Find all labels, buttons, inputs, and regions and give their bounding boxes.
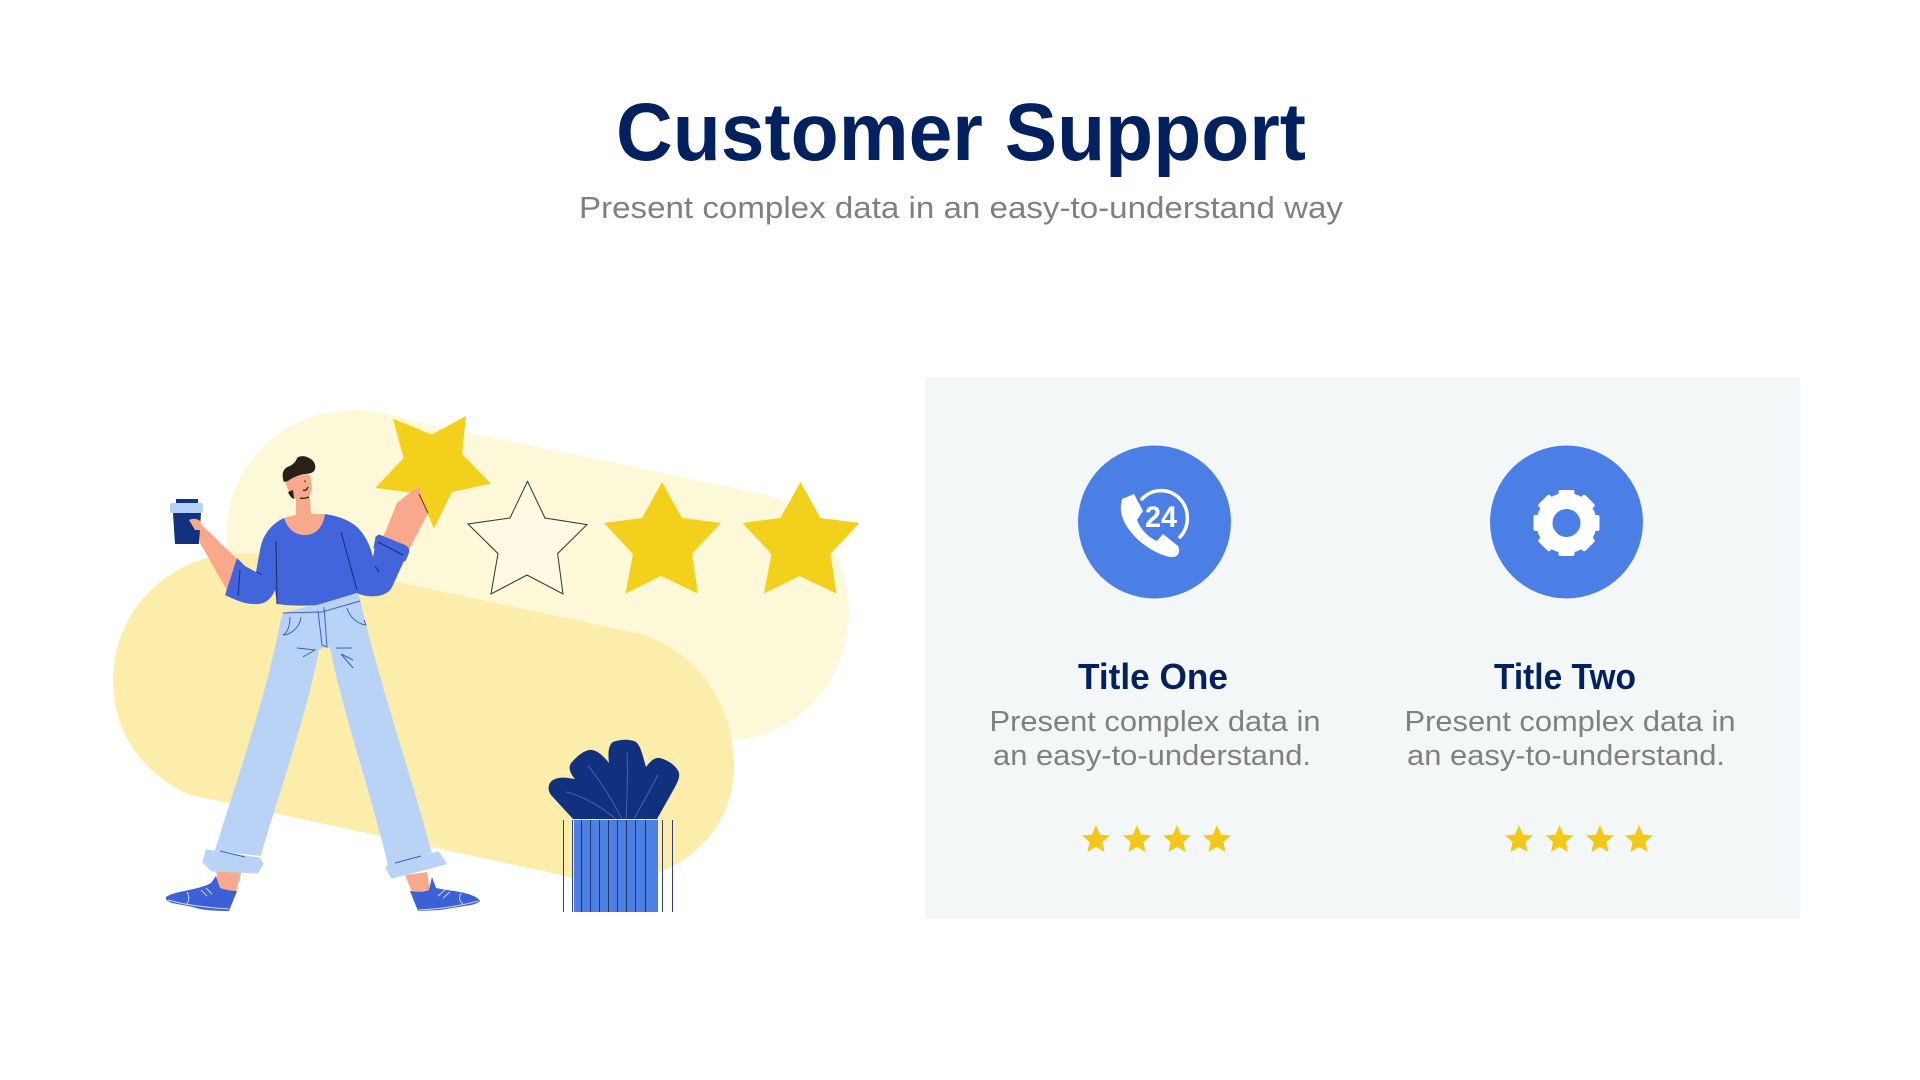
coffee cup [170, 499, 203, 544]
forearm: left [190, 519, 238, 592]
leaf veins [566, 752, 658, 819]
description: title two [1404, 706, 1736, 772]
pot stripes [564, 820, 672, 912]
hand crease on star [419, 494, 428, 513]
arc [1142, 491, 1187, 537]
hair [283, 456, 315, 499]
panel background [925, 377, 1800, 919]
description: title one: Present complex data in [990, 706, 1320, 738]
ankles [216, 868, 430, 892]
icon: gear [1490, 446, 1643, 598]
title: Customer Support [616, 87, 1306, 178]
background blob: dark yellow [113, 553, 734, 883]
star: filled third [604, 482, 721, 594]
number 24: 24 [1145, 501, 1177, 534]
cup lid top [176, 499, 198, 505]
card: title one [990, 446, 1320, 852]
cup body [173, 513, 201, 544]
icon: 24 hour phone [1078, 446, 1231, 598]
star: filled fourth [742, 482, 860, 594]
plant [549, 740, 679, 912]
jeans details [220, 601, 421, 863]
card: title two [1404, 446, 1736, 852]
phone handset [1121, 494, 1179, 557]
illustration: person rating with stars [113, 410, 860, 912]
heading: title two: Title Two [1494, 656, 1636, 697]
panel: service cards [925, 377, 1800, 919]
description: title two: Present complex data in [1404, 706, 1736, 738]
star: held by person [376, 416, 491, 529]
rating stars [1082, 825, 1231, 852]
person [166, 456, 480, 911]
neck and chest [284, 497, 325, 535]
background blob: light yellow [227, 410, 849, 740]
gear teeth [1534, 490, 1600, 556]
subtitle: Present complex data in an easy-to-understand way [579, 190, 1344, 225]
heading: title one: Title One [1078, 656, 1228, 697]
jeans [215, 593, 432, 865]
description: title one [990, 706, 1320, 772]
rating stars [1505, 825, 1653, 852]
hand on cup [189, 519, 203, 530]
shoe details [168, 888, 478, 910]
description: title two: an easy-to-understand. [1407, 740, 1725, 772]
shirt [225, 514, 408, 606]
shirt cuff right [374, 535, 409, 561]
shirt seams [238, 532, 403, 604]
cup lid [170, 503, 203, 513]
gear ring [1544, 501, 1588, 545]
forearm: right with hand [380, 487, 428, 552]
shoes [166, 876, 480, 911]
face [285, 474, 312, 500]
icon circle [1078, 446, 1231, 598]
pot [574, 820, 658, 912]
icon circle [1490, 446, 1643, 598]
jeans cuffs [204, 851, 445, 877]
face details [300, 480, 309, 498]
leaves [549, 740, 679, 819]
star: outline [468, 481, 587, 594]
description: title one: an easy-to-understand. [993, 740, 1311, 772]
